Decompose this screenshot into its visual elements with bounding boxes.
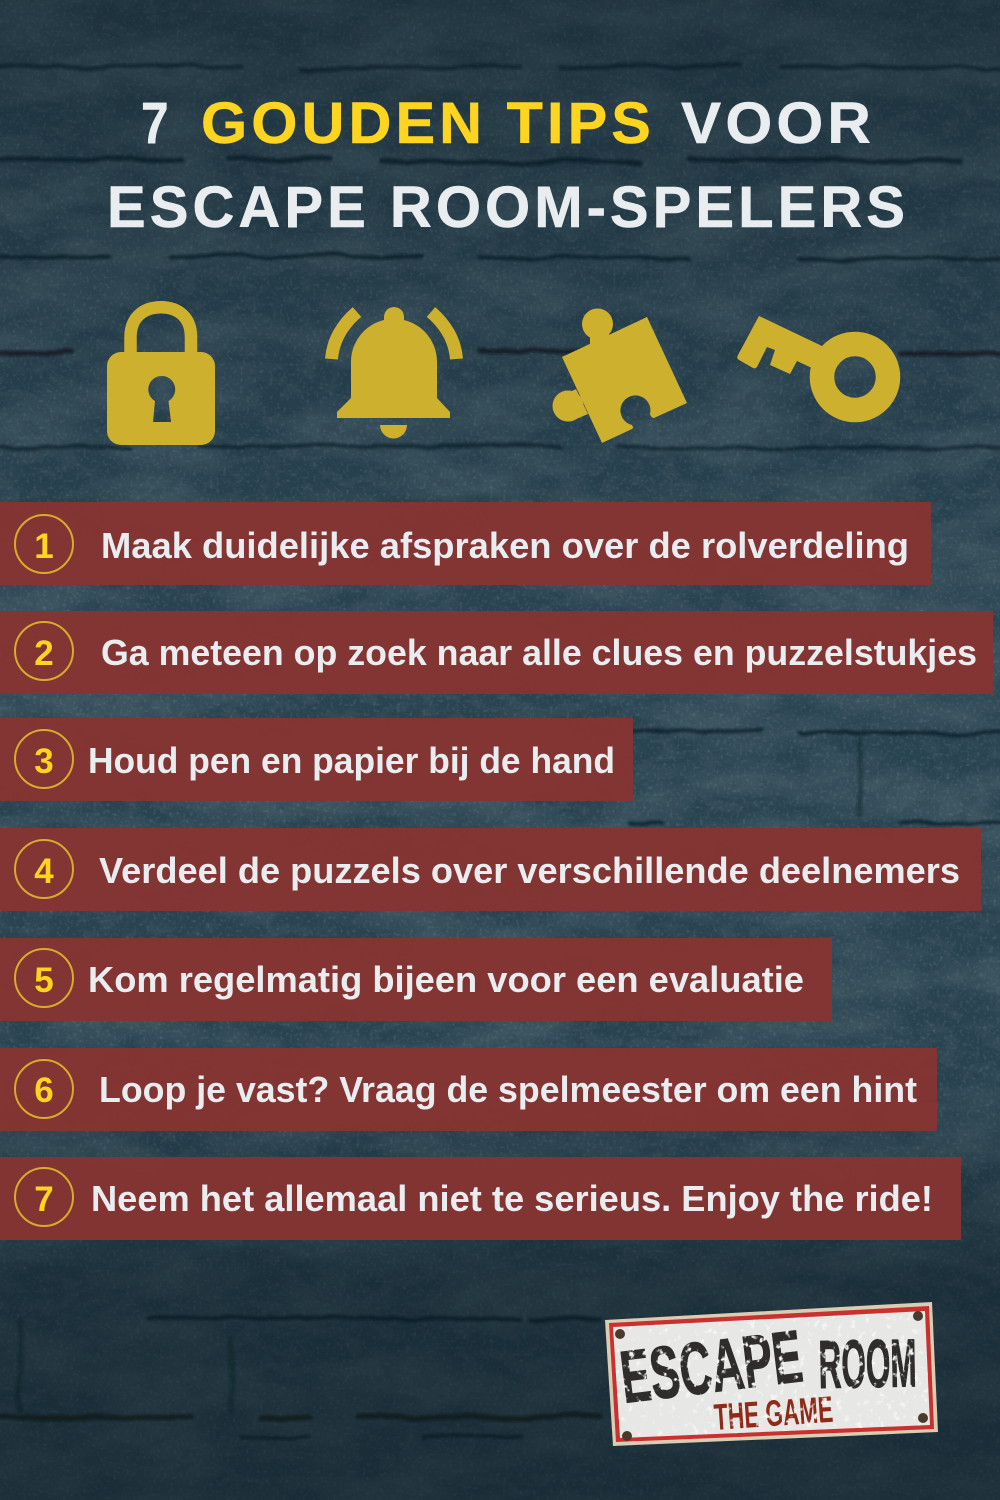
tip 4 [0,828,981,911]
icon: puzzle piece [552,308,687,443]
icon: padlock [107,307,215,445]
tip 5 [0,938,832,1021]
tip 2: 2 [34,634,54,673]
title: ESCAPE ROOM-SPELERS [107,175,909,240]
tip 3 [0,718,633,801]
title: VOOR [681,91,875,156]
title: GOUDEN TIPS [201,91,655,156]
tip 7: Neem het allemaal niet te serieus. Enjoy the ride! [91,1178,933,1219]
tip 5: 5 [34,961,54,1000]
logo: Escape Room The Game sign: THE GAME [713,1389,834,1438]
tip 3: Houd pen en papier bij de hand [88,740,615,781]
tip 1: 1 [34,527,54,566]
tip 2 [0,611,993,694]
tip 4: Verdeel de puzzels over verschillende deelnemers [99,850,960,891]
tip 3: 3 [34,742,54,781]
tip 2: Ga meteen op zoek naar alle clues en puzzelstukjes [101,632,977,673]
icon: ringing bell [332,307,456,439]
title: 7 [141,91,172,156]
tip 6: Loop je vast? Vraag de spelmeester om een hint [99,1069,917,1110]
tip 6: 6 [34,1071,54,1110]
tip 4: 4 [34,852,54,891]
tip 5: Kom regelmatig bijeen voor een evaluatie [88,959,804,1000]
tip 7: 7 [34,1180,54,1219]
tip 6 [0,1048,937,1131]
tip 1: Maak duidelijke afspraken over de rolverdeling [101,525,909,566]
title [107,91,909,240]
tip 1 [0,502,931,585]
tip 7 [0,1157,961,1240]
logo: Escape Room The Game sign: ESCAPE [616,1314,807,1419]
icon: key [737,316,888,410]
